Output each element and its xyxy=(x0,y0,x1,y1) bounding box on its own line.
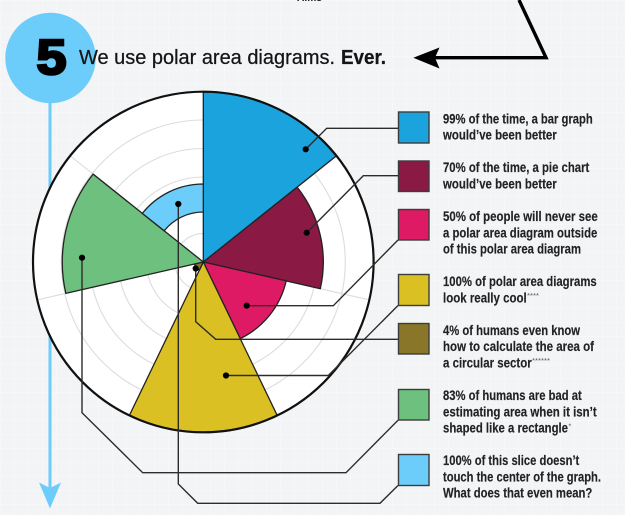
leader lines xyxy=(79,128,398,503)
chart outline xyxy=(33,92,374,432)
legend text: olive: a circular sector xyxy=(443,355,532,370)
chart background disc xyxy=(33,92,373,432)
legend text: light blue: What does that even mean? xyxy=(443,486,592,501)
legend text: pink: 50% of people will never see xyxy=(443,209,598,224)
legend swatch: blue xyxy=(398,112,429,143)
legend text: blue: 99% of the time, a bar graph xyxy=(443,111,593,126)
leader: maroon xyxy=(304,176,398,236)
slice: light blue xyxy=(142,184,203,231)
slice: maroon xyxy=(203,187,323,289)
legend text: yellow: **** xyxy=(527,293,539,300)
legend text: maroon xyxy=(442,160,590,191)
legend text: green xyxy=(443,388,597,436)
slice: pink xyxy=(203,262,286,339)
legend swatch: green xyxy=(398,390,429,420)
legend text: green: 83% of humans are bad at xyxy=(443,388,582,403)
slice: blue xyxy=(203,92,336,262)
leader: pink xyxy=(244,240,398,309)
legend text: olive: ****** xyxy=(532,358,550,365)
legend text: olive xyxy=(443,323,594,370)
slice: yellow xyxy=(130,262,277,432)
legend swatch: maroon xyxy=(398,161,429,192)
heading: We use polar area diagrams. xyxy=(79,47,335,69)
leader: yellow xyxy=(223,306,398,379)
grid rings and spokes xyxy=(38,120,369,415)
legend text: olive: 4% of humans even know xyxy=(443,323,580,338)
heading: Ever. xyxy=(341,47,386,69)
legend text: olive: how to calculate the area of xyxy=(443,339,594,354)
legend text: green: estimating area when it isn’t xyxy=(443,404,597,419)
legend swatch: olive xyxy=(398,324,429,354)
legend text: pink: of this polar area diagram xyxy=(443,241,581,256)
number badge: 5 xyxy=(36,31,66,85)
slice: olive xyxy=(194,262,203,270)
legend text: green: shaped like a rectangle xyxy=(443,421,568,436)
leader: green xyxy=(79,255,398,473)
legend swatch: yellow xyxy=(398,274,429,306)
arrow: black pointer to heading xyxy=(413,0,546,68)
legend swatch: pink xyxy=(398,210,429,240)
legend xyxy=(398,111,601,501)
legend text: yellow: look really cool xyxy=(443,290,527,305)
legend text: yellow xyxy=(443,274,597,305)
polar area chart xyxy=(33,92,374,432)
legend text: light blue: 100% of this slice doesn’t xyxy=(443,453,580,468)
legend text: pink xyxy=(443,209,598,256)
legend text: yellow: 100% of polar area diagrams xyxy=(443,274,597,289)
legend text: light blue xyxy=(443,453,601,501)
number badge xyxy=(5,13,96,103)
legend text: blue xyxy=(442,111,593,142)
leader: light blue xyxy=(175,201,398,503)
leader: blue xyxy=(303,128,398,152)
legend text: maroon: 70% of the time, a pie chart xyxy=(443,160,590,175)
legend swatch: light blue xyxy=(398,454,429,486)
legend text: pink: a polar area diagram outside xyxy=(443,225,598,240)
arrow: blue vertical timeline xyxy=(39,100,61,508)
legend text: green: * xyxy=(568,424,572,430)
legend text: blue: would’ve been better xyxy=(442,127,557,142)
leader: olive xyxy=(193,265,398,339)
slice: green xyxy=(62,174,203,293)
legend text: maroon: would’ve been better xyxy=(442,176,557,191)
